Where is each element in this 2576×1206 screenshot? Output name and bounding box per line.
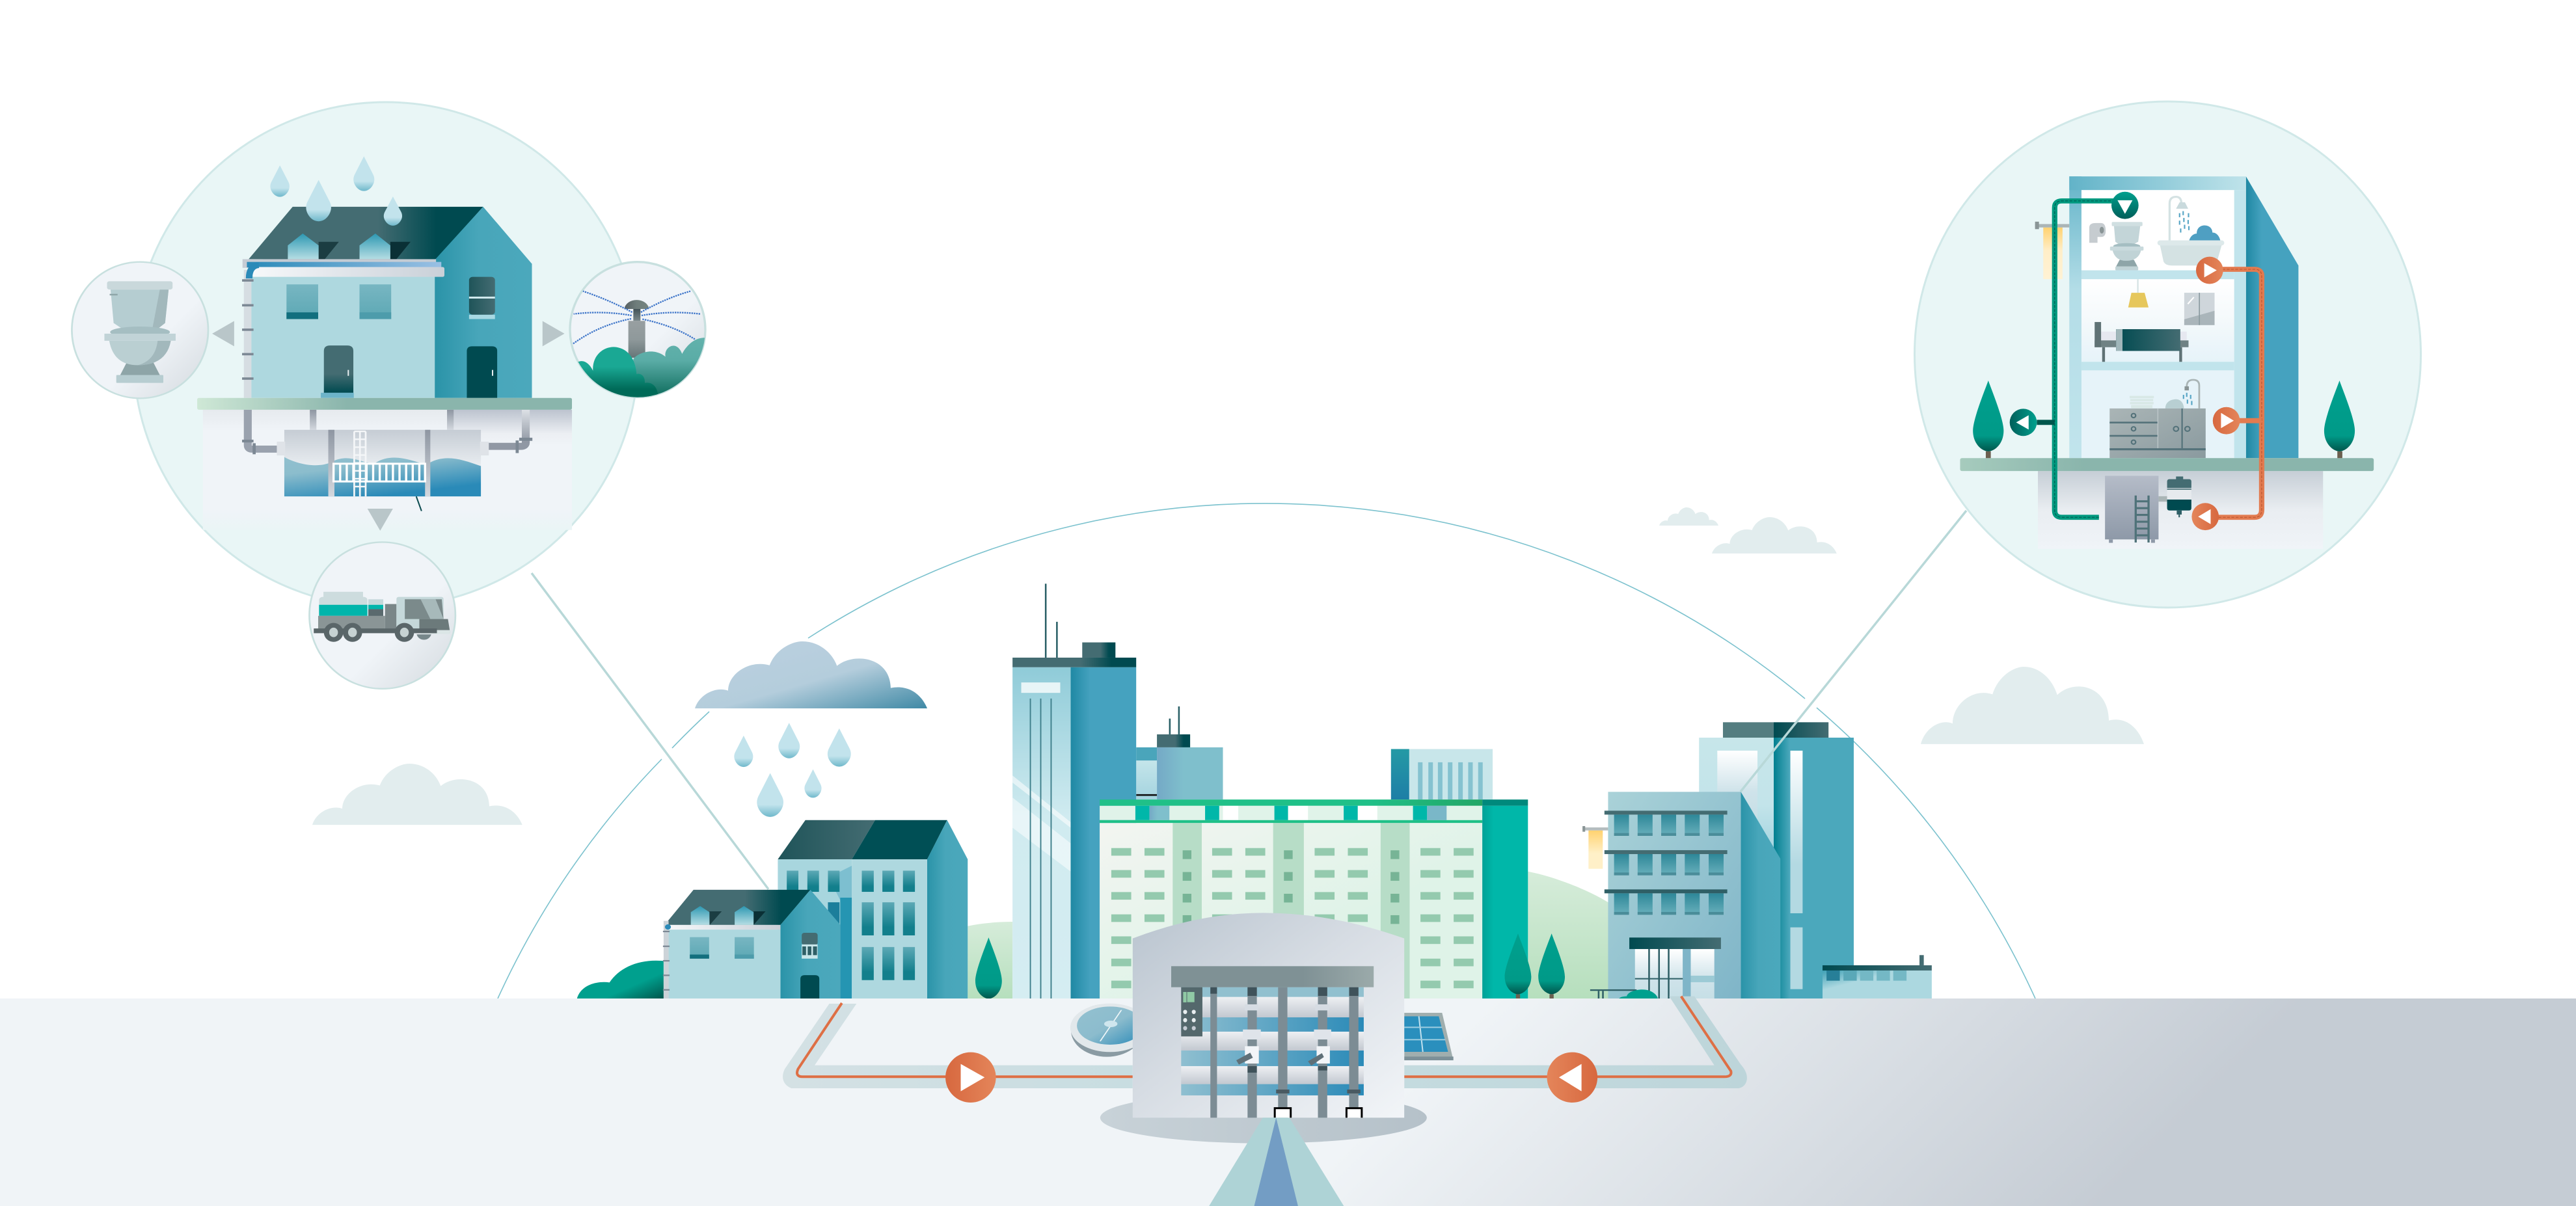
low annex [1823,955,1932,999]
large house [778,820,968,998]
plant roof bar [1171,966,1374,987]
connector line: right building [1741,511,1966,792]
small house [663,890,840,998]
valves [1236,1004,1362,1118]
hanging banner [1582,826,1608,869]
green flow arrow: left [2010,409,2037,436]
front building [1605,792,1780,999]
ground slab [1960,458,2374,471]
inset: sprinkler [570,262,711,403]
left houses [577,820,1012,998]
platform [1100,1092,1427,1144]
panel: rainwater harvesting house [72,102,711,689]
house [249,207,532,398]
bench and bush [1590,989,1658,999]
outflow channel [1209,1118,1344,1206]
green reclaimed-water pipe [2037,201,2115,517]
hill behind tower [968,922,1012,998]
orange flow arrow: kitchen [2213,407,2240,435]
underground section [2038,471,2323,549]
arrow: to sprinkler [543,321,565,346]
central high-rise and mid-rise [1012,583,1608,999]
bed [2095,322,2188,362]
orange flow arrow: basement [2191,503,2219,530]
underground section [203,410,572,530]
orange flow arrow: bath [2196,257,2223,284]
panel: greywater recycling building [1914,101,2420,608]
shower and bathtub [2158,197,2224,265]
back tower [1699,722,1854,999]
arrow: to toilet [212,321,234,346]
toilet roll [2089,223,2106,243]
right office buildings [1582,722,1932,999]
flow arrow right [1547,1052,1597,1103]
arrow: to truck [368,509,393,531]
treatment unit in basement [2105,476,2191,543]
control panel [1181,987,1202,1036]
hill right [1528,872,1608,999]
trees [1973,381,2355,458]
kitchen counter [2109,380,2206,458]
plant building [1133,913,1404,1118]
trees [1505,933,1565,999]
pipe trench right [1404,997,1747,1088]
rain cloud with drops [695,641,927,817]
toilet [2110,222,2143,271]
wardrobe [2184,293,2215,325]
vertical pipes [1210,987,1359,1118]
ground [0,998,2576,1206]
orange pipes [797,997,1731,1077]
green mid-rise [1100,799,1528,999]
cistern and pipes [242,410,532,511]
flow arrow left [945,1052,996,1103]
green flow arrow: down [2111,192,2139,219]
ground slab [197,398,572,410]
connector line: left house [532,573,768,889]
inset: toilet [72,262,208,398]
towel rail [2035,222,2069,279]
clarifier disc [1070,1004,1150,1057]
pipe trench left [783,1004,1133,1088]
gutter and downpipe [242,259,444,398]
tall tower [1012,583,1136,999]
bush [577,961,664,998]
inset: tanker truck [309,542,455,689]
background clouds [312,507,2144,825]
dome arc over the city [498,503,2035,998]
building frame [2069,176,2298,458]
lamp [2128,279,2149,308]
orange greywater pipe [2217,269,2262,517]
small back buildings [1136,706,1493,799]
plant cut-away tanks [1181,987,1364,1095]
solar panel [1404,1013,1454,1060]
treatment plant and pipes [783,913,1747,1206]
rain drops on roof [270,156,402,226]
tree [975,937,1002,998]
